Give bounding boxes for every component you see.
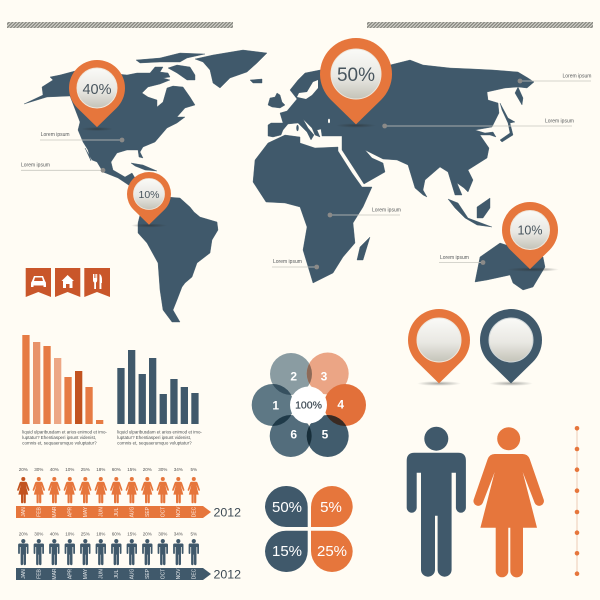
flower numbers: 3: [321, 369, 328, 383]
text block: blue chart caption: luptatur? Ehentiasperi ipsunt videnist,: [117, 435, 191, 440]
month arrow orange: MAY: [83, 506, 89, 517]
percent labels men: 60%: [112, 532, 121, 536]
map: Eurasia: [268, 60, 534, 197]
pin: 40%: 40%: [82, 82, 112, 98]
text block: blue chart caption: liquid ulparibusdam et arios enimod et imo-: [117, 429, 202, 434]
month arrow blue: AUG: [130, 568, 136, 579]
pin: 10% South America: 10%: [138, 189, 160, 201]
text block: orange chart caption: luptatur? Ehentiasperi ipsunt videnist,: [22, 435, 96, 440]
percent labels men: 30%: [158, 532, 167, 536]
women figures: [17, 477, 200, 503]
percent labels women: 40%: [50, 467, 59, 472]
percent labels women: 18%: [96, 467, 105, 472]
month arrow blue: FEB: [36, 568, 42, 579]
pin: 10% Australia: 10%: [517, 224, 543, 238]
percent labels men: 20%: [19, 532, 28, 536]
header hatched rule right: [367, 22, 593, 28]
percent labels men: 40%: [50, 532, 59, 536]
text block: blue chart caption: comnis et, sequaerumquo voluptatur?: [117, 440, 192, 445]
callout: North America label: [40, 132, 124, 142]
callout: Asia label: [382, 118, 574, 128]
flower numbers: 6: [290, 427, 297, 441]
men figures: [18, 539, 199, 565]
callout: Africa label: [328, 208, 401, 217]
percent labels women: 5%: [190, 467, 197, 472]
month arrow blue: OCT: [160, 569, 166, 579]
icon: house: [55, 268, 80, 297]
man figure: [407, 427, 466, 577]
percent labels women: 30%: [158, 467, 167, 472]
callouts on map: [21, 74, 591, 269]
month arrow blue: JAN: [21, 569, 27, 579]
month arrow orange: OCT: [160, 507, 166, 517]
dotted timeline: [575, 426, 579, 576]
bar chart: orange: [22, 335, 103, 424]
map: Britain: [268, 93, 285, 108]
percent labels men: 20%: [143, 532, 152, 536]
percent labels women: 20%: [19, 467, 28, 472]
callout: Mexico label: [21, 162, 105, 173]
icon: car: [26, 268, 51, 297]
pin: 50%: 50%: [337, 65, 375, 86]
large pin: blue: [480, 309, 542, 386]
callout: Russia east label: Lorem ipsum: [562, 74, 591, 80]
pin: 50%: [320, 38, 392, 128]
month arrow blue: [16, 568, 211, 580]
callout: Mexico label: Lorem ipsum: [21, 162, 50, 168]
month arrow orange: JAN: [21, 507, 27, 517]
callout: Africa south label: Lorem ipsum: [273, 259, 302, 265]
flower numbers: [272, 369, 344, 441]
flower numbers: 4: [337, 397, 344, 411]
percent labels women: 20%: [143, 467, 152, 472]
flower numbers: 5: [322, 427, 329, 441]
callout: North America label: Lorem ipsum: [41, 132, 70, 138]
map: Arctic island: [136, 53, 205, 63]
icon banners: [26, 268, 110, 297]
callout: Australia label: [439, 255, 485, 265]
clover chart: [265, 486, 353, 572]
large pin: orange: [408, 309, 470, 386]
callout: Australia label: Lorem ipsum: [440, 255, 469, 261]
percent labels men: [19, 532, 197, 536]
percent labels men: 15%: [127, 532, 136, 536]
callout: Russia east label: [518, 74, 591, 83]
text block: orange chart caption: liquid ulparibusdam et arios enimod et imo-: [22, 429, 107, 434]
year label: 2012: [214, 506, 241, 520]
map: Black Sea: [328, 119, 330, 123]
percent labels women: 15%: [127, 467, 136, 472]
map: Africa: [253, 135, 372, 283]
percent labels men: 18%: [96, 532, 105, 536]
percent labels men: 30%: [34, 532, 43, 536]
map: Sardinia: [296, 125, 298, 131]
map: North America: [24, 67, 195, 186]
pictogram row: men: [16, 532, 241, 582]
header hatched rule left: [7, 22, 233, 28]
map: South America: [138, 197, 218, 322]
month arrow blue: DEC: [192, 568, 198, 579]
world map: [24, 50, 545, 322]
callout: Africa south label: [272, 259, 319, 269]
callout: Asia label: Lorem ipsum: [545, 118, 574, 124]
pin: 10% South America: [127, 172, 171, 228]
month arrow orange: DEC: [192, 506, 198, 517]
flower centre text: 100%: [295, 400, 322, 412]
month arrow orange: JUL: [114, 507, 120, 516]
month arrow blue: JUN: [98, 569, 104, 579]
map: Madagascar: [357, 237, 370, 260]
pin: 10% Australia: [502, 202, 559, 272]
percent labels men: 5%: [190, 532, 197, 536]
icon: fork and knife: [84, 268, 110, 297]
clover: 25%: 25%: [317, 543, 347, 560]
month arrow orange: FEB: [36, 506, 42, 517]
pictogram row: women: [16, 467, 241, 520]
flower centre: [290, 386, 327, 424]
clover: 50%: 50%: [272, 499, 302, 516]
map: Borneo: [477, 198, 490, 218]
month arrow orange: APR: [68, 506, 74, 517]
map: Baltic Sea: [297, 80, 318, 99]
percent labels women: 25%: [81, 467, 90, 472]
map: Australia: [475, 243, 545, 290]
flower numbers: 2: [290, 369, 297, 383]
month arrow orange: [16, 506, 211, 518]
percent labels men: 10%: [65, 532, 74, 536]
woman figure: [473, 427, 544, 577]
petals: [252, 352, 366, 457]
percent labels women: [19, 467, 197, 472]
map: Baffin island: [168, 65, 195, 80]
map: Iceland: [250, 79, 262, 83]
month arrow blue: APR: [68, 568, 74, 579]
percent labels men: 34%: [174, 532, 183, 536]
percent labels men: 25%: [81, 532, 90, 536]
month arrow blue: MAY: [83, 568, 89, 579]
text block: orange chart caption: comnis et, sequaerumquo voluptatur?: [22, 440, 97, 445]
month arrow orange: NOV: [176, 506, 182, 517]
month arrow blue: MAR: [52, 568, 58, 580]
month arrow orange: SEP: [145, 506, 151, 517]
clover: 15%: 15%: [272, 543, 302, 560]
map: Cuba: [131, 163, 157, 171]
percent labels women: 60%: [112, 467, 121, 472]
percent labels women: 34%: [174, 467, 183, 472]
callout: Africa label: Lorem ipsum: [372, 208, 401, 214]
map: Indonesia: [448, 199, 492, 227]
month arrow orange: JUN: [98, 507, 104, 517]
flower diagram: [252, 352, 366, 457]
month arrow orange: AUG: [130, 506, 136, 517]
pin: 40%: [69, 60, 125, 131]
map: Japan arc: [500, 103, 515, 142]
flower numbers: 1: [272, 398, 279, 412]
month arrow blue: SEP: [145, 568, 151, 579]
month arrow blue: JUL: [114, 569, 120, 578]
year label: 2012: [214, 568, 241, 582]
percent labels women: 30%: [34, 467, 43, 472]
bar chart: blue: [117, 350, 199, 424]
map: Greenland: [195, 50, 267, 88]
month arrow orange: MAR: [52, 506, 58, 518]
percent labels women: 10%: [65, 467, 74, 472]
clover: 5%: 5%: [320, 499, 342, 516]
month arrow blue: NOV: [176, 568, 182, 579]
